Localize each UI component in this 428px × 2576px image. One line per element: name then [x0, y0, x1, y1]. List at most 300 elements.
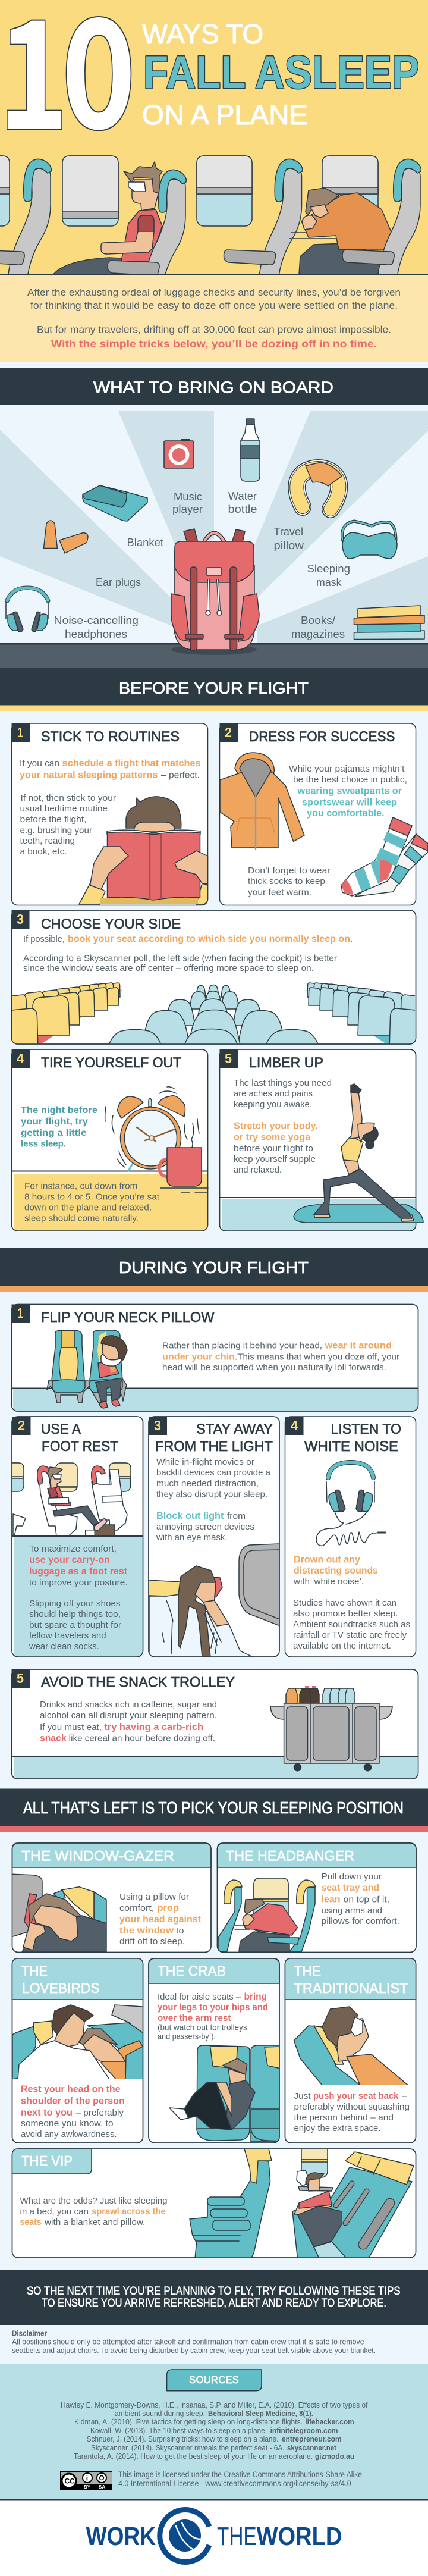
body text: annoying screen devices: [156, 1522, 254, 1532]
banner: closing message: [0, 2270, 428, 2325]
body text: usual bedtime routine: [20, 804, 108, 814]
body text: bring: [244, 1992, 267, 2002]
body text: but spare a thought for: [29, 1620, 121, 1630]
source list: Kowall, W. (2013). The 10 best ways to sleep on a plane.: [90, 2426, 267, 2435]
heading: AVOID THE SNACK TROLLEY: [41, 1675, 235, 1691]
body text: luggage as a foot rest: [29, 1566, 127, 1577]
body text: backlit devices can provide a: [156, 1468, 271, 1478]
panel: the headbanger: [218, 1843, 416, 1953]
icon: water bottle: [241, 419, 260, 481]
body text: your feet warm.: [248, 888, 311, 898]
source list: Skyscanner. (2014). Skyscanner reveals the perfect seat - 6A.: [91, 2443, 284, 2452]
body text: comfort,: [119, 1903, 154, 1913]
source list: Hawley E. Montgomery-Downs, H.E., Insanaa, S.P. and Miller, E.A. (2010). Effects of two types of: [61, 2400, 368, 2409]
panel: 2 dress for success: [220, 723, 428, 905]
body text: fellow travelers and: [29, 1631, 106, 1641]
body text: next to you: [21, 2108, 73, 2118]
floor: [14, 1757, 417, 1778]
heading: CHOOSE YOUR SIDE: [41, 916, 181, 932]
number tab: [12, 1669, 30, 1688]
banner: what to bring on board: WHAT TO BRING ON BOARD: [93, 378, 333, 396]
header: [12, 1843, 211, 1867]
illustration: plane cabin: [0, 155, 422, 274]
heading: THE WINDOW-GAZER: [21, 1848, 174, 1864]
icon: travel pillow: [297, 462, 342, 509]
body text: enjoy the extra space.: [294, 2123, 380, 2133]
heading: [41, 1421, 118, 1455]
license text: This image is licensed under the Creative Commons Attributions-Share Alike: [118, 2470, 362, 2479]
labels: Noise-cancelling: [54, 615, 139, 626]
body text: According to a Skyscanner poll, the left side (when facing the cockpit) is better: [23, 953, 337, 964]
number tab: [12, 1304, 30, 1323]
source list: Behavioral Sleep Medicine, 8(1).: [208, 2409, 313, 2418]
labels: mask: [316, 576, 342, 588]
header: [285, 1958, 416, 2000]
heading: THE: [294, 1963, 321, 1979]
body text: lean: [321, 1895, 340, 1905]
source list: ambient sound during sleep.: [115, 2409, 205, 2418]
body text: [293, 1555, 410, 1651]
title: big number 10: [0, 0, 136, 173]
source list: gizmodo.au: [315, 2452, 354, 2461]
icon: creative commons badge: CC: [64, 2477, 75, 2486]
seat and tray: [224, 158, 303, 274]
illustration: vip seats: [190, 2142, 414, 2258]
body text: – perfect.: [161, 770, 200, 781]
number tab: 4: [291, 1418, 298, 1433]
panel: 1 stick to routines: [12, 723, 208, 905]
body text: If possible,: [23, 934, 65, 944]
body text: with ‘white noise’.: [293, 1577, 364, 1587]
logo: work the world: WORLD: [257, 2522, 342, 2551]
body text: a book, etc.: [20, 847, 67, 857]
labels: Travel: [273, 526, 303, 538]
source list: Schnuer, J. (2014). Surprising tricks: how to sleep on a plane.: [87, 2434, 278, 2443]
illustration: mug: [159, 1148, 208, 1193]
heading: LOVEBIRDS: [22, 1980, 100, 1997]
illustration: headbanger: [218, 1878, 316, 1951]
labels: magazines: [291, 628, 345, 640]
body text: with an eye mask.: [156, 1533, 227, 1543]
source list: lifehacker.com: [305, 2417, 354, 2426]
icon: music player: [164, 439, 194, 468]
banner: before your flight: BEFORE YOUR FLIGHT: [119, 679, 309, 697]
illustration: socks: [341, 817, 428, 897]
labels: Ear plugs: [96, 576, 141, 588]
icon: backpack: [171, 529, 259, 655]
body text: Rather than placing it behind your head,: [162, 1340, 322, 1350]
license text: 4.0 International License - www.creativecommons.org/license/by-sa/4.0: [118, 2478, 351, 2488]
body text: – preferably: [76, 2108, 124, 2118]
title: on a plane: ON A PLANE: [142, 99, 308, 130]
body text: wear clean socks.: [29, 1641, 99, 1651]
sunburst rays: [0, 411, 428, 644]
body text: [248, 764, 407, 898]
number tab: [285, 1417, 303, 1435]
icon: creative commons badge: i: [86, 2474, 88, 2482]
body text: preferably without squashing: [294, 2102, 410, 2112]
labels: Water: [228, 490, 257, 502]
body text: are aches and pains: [234, 1089, 313, 1099]
body text: While your pajamas mightn’t: [289, 764, 405, 774]
heading: [21, 1963, 100, 1997]
illustration: trolley: [270, 1686, 392, 1771]
floor: [0, 644, 428, 668]
body text: [20, 759, 201, 857]
illustration: yoga: [294, 1084, 423, 1223]
number tab: [220, 723, 238, 742]
body text: Ambient soundtracks such as: [293, 1619, 410, 1629]
heading: FLIP YOUR NECK PILLOW: [41, 1309, 215, 1325]
body text: available on the internet.: [293, 1641, 391, 1651]
body text: getting a little: [21, 1128, 87, 1138]
body text: before your flight to: [234, 1143, 313, 1154]
body text: thick socks to keep: [248, 876, 325, 886]
heading: TRADITIONALIST: [294, 1980, 408, 1997]
panel: the traditionalist: [285, 1958, 416, 2143]
panel: the lovebirds: [12, 1958, 143, 2143]
number tab: 1: [17, 725, 23, 740]
intro paragraph: for thinking that it would be easy to doze off once you were settled on the plane.: [30, 300, 398, 311]
icon: ear plugs: [44, 521, 88, 553]
body text: seats: [20, 2217, 42, 2227]
heading: TIRE YOURSELF OUT: [41, 1055, 181, 1071]
illustration: traveller on foot rest: [0, 1463, 131, 1536]
body text: Slipping off your shoes: [29, 1599, 120, 1609]
panel: avoid the snack trolley: [12, 1669, 418, 1779]
illustration: crab: [169, 2045, 281, 2142]
labels: Sleeping: [307, 563, 350, 575]
source list: Kidman, A. (2010). Five tactics for getting sleep on long-distance flights.: [74, 2417, 303, 2426]
yellow note text: sleep should come naturally.: [24, 1214, 139, 1224]
body text: Using a pillow for: [119, 1892, 189, 1902]
header: [218, 1843, 416, 1867]
header panel: [0, 0, 428, 275]
intro panel: [0, 275, 428, 362]
body text: While in-flight movies or: [156, 1457, 254, 1467]
body text: If you can: [20, 759, 59, 769]
body text: keeping you awake.: [234, 1099, 312, 1110]
body text: from: [227, 1511, 246, 1521]
panel: use a foot rest: [0, 1417, 145, 1658]
body text: like cereal an hour before dozing off.: [69, 1734, 215, 1744]
panel: the window-gazer: [9, 1843, 211, 1953]
labels: player: [172, 503, 203, 515]
icon: blanket: [83, 485, 147, 521]
source list: entrepreneur.com: [282, 2434, 341, 2443]
body text: Drinks and snacks rich in caffeine, sugar and: [40, 1700, 217, 1710]
number tab: 1: [17, 1305, 23, 1321]
body text: in a bed, you can: [20, 2207, 89, 2217]
source list: Tarantola, A. (2014). How to get the best sleep of your life on an aeroplane.: [74, 2452, 313, 2461]
number tab: [12, 723, 30, 742]
icon: creative commons badge: BY: [84, 2484, 91, 2490]
intro paragraph: But for many travelers, drifting off at 30,000 feet can prove almost impossible.: [37, 324, 391, 336]
body text: and relaxed.: [234, 1165, 282, 1175]
heading: THE HEADBANGER: [226, 1848, 354, 1864]
yellow note text: 8 hours to 4 or 5. Once you’re sat: [24, 1192, 160, 1202]
sources button: SOURCES: [189, 2374, 239, 2386]
source list: infinitelegroom.com: [270, 2426, 338, 2435]
body text: [21, 1105, 97, 1149]
floor: [222, 1199, 418, 1233]
panel: 5 limber up: [220, 1049, 423, 1233]
body text: [29, 1544, 127, 1651]
banner: before your flight: [0, 668, 428, 711]
body text: be the best choice in public,: [293, 775, 407, 785]
header: [12, 2149, 92, 2174]
panel: the crab: [149, 1958, 281, 2143]
heading: THE VIP: [21, 2154, 73, 2170]
intro highlight: With the simple tricks below, you’ll be dozing off in no time.: [51, 338, 377, 350]
body text: the window: [119, 1926, 174, 1936]
icon: sleeping mask: [342, 521, 397, 559]
body text: Block out light: [156, 1511, 224, 1521]
heading: FROM THE LIGHT: [155, 1439, 273, 1455]
illustration: person reading: [79, 797, 208, 904]
title: ways to: WAYS TO: [142, 18, 263, 49]
heading: LIMBER UP: [249, 1055, 323, 1071]
body text: (but watch out for trolleys: [158, 2023, 247, 2032]
body text: your natural sleeping patterns: [20, 770, 158, 781]
yellow note text: For instance, cut down from: [24, 1182, 137, 1192]
body text: sprawl across the: [92, 2207, 166, 2217]
body text: wear it around: [324, 1340, 392, 1350]
body text: Drown out any: [294, 1555, 360, 1565]
body text: Just: [294, 2091, 311, 2101]
body text: head will be supported when you naturally loll forwards.: [162, 1362, 386, 1372]
heading: [294, 1963, 408, 1997]
yellow note text: [24, 1182, 160, 1224]
logo: work the world: THE: [217, 2522, 257, 2551]
body text: seat tray and: [321, 1883, 379, 1893]
body text: your head against: [119, 1914, 201, 1925]
body text: snack: [40, 1734, 67, 1744]
source list: skyscanner.net: [287, 2443, 337, 2452]
heading: LISTEN TO: [331, 1421, 401, 1437]
banner: during your flight: DURING YOUR FLIGHT: [119, 1258, 309, 1277]
heading: DRESS FOR SUCCESS: [249, 729, 395, 745]
banner: during your flight: [0, 1248, 428, 1292]
body text: Stretch your body,: [234, 1121, 318, 1132]
body text: distracting sounds: [294, 1566, 378, 1576]
body text: less sleep.: [21, 1139, 66, 1149]
body text: sportswear will keep: [302, 797, 397, 808]
body text: someone you know, to: [21, 2119, 114, 2129]
body text: your flight, try: [21, 1117, 88, 1127]
body text: [294, 2091, 410, 2133]
labels: Music: [174, 491, 202, 503]
panel: 3 choose your side: [11, 910, 416, 1045]
body text: [23, 934, 353, 973]
body text: on top of it,: [344, 1895, 389, 1905]
illustration: hoodie: [220, 753, 304, 849]
disclaimer: Disclaimer: [12, 2329, 47, 2338]
body text: [119, 1892, 201, 1947]
body text: try having a carb-rich: [104, 1722, 203, 1732]
license text: [118, 2470, 362, 2488]
labels: pillow: [273, 540, 304, 551]
body text: e.g. brushing your: [20, 826, 92, 835]
body text: shoulder of the person: [21, 2096, 125, 2107]
panel: 4 tire yourself out: [12, 1049, 208, 1231]
body text: alcohol can all disrupt your sleeping pattern.: [40, 1710, 217, 1721]
panel: sources: [0, 2364, 428, 2501]
note background: [14, 1537, 145, 1658]
body text: they also disrupt your sleep.: [156, 1489, 268, 1499]
icon: headphones: [6, 588, 49, 632]
illustration: lovebirds: [12, 2005, 143, 2079]
disclaimer: seatbelts and adjust chairs. To avoid being disturbed by cabin crew, keep your seat belt visible above your blanket.: [12, 2346, 376, 2355]
person: man with eye mask: [54, 162, 162, 274]
body text: using arms and: [321, 1906, 382, 1916]
icon: globe: [160, 2509, 209, 2562]
body text: To maximize comfort,: [29, 1544, 117, 1554]
labels: Blanket: [127, 537, 163, 549]
heading: [155, 1421, 273, 1455]
number tab: [220, 1049, 238, 1068]
body text: the person behind – and: [294, 2113, 394, 2123]
body text: to improve your posture.: [29, 1578, 127, 1588]
illustration: cabin seats: [12, 982, 415, 1043]
logo: work the world: WORK: [86, 2522, 156, 2551]
body text: use your carry-on: [29, 1555, 110, 1565]
floor: [13, 1389, 420, 1412]
body text: book your seat according to which side you normally sleep on: [68, 934, 350, 944]
sources button: [167, 2370, 262, 2391]
body text: you comfortable.: [307, 808, 384, 819]
icon: creative commons badge: SA: [99, 2484, 105, 2490]
body text: drift off to sleep.: [119, 1936, 185, 1947]
body text: also promote better sleep.: [293, 1609, 398, 1619]
body text: .: [350, 934, 353, 944]
windows: [0, 156, 378, 226]
panel: listen to white noise: [285, 1417, 416, 1657]
banner: sleeping position: [0, 1788, 428, 1832]
number tab: 3: [17, 911, 24, 927]
number tab: 3: [154, 1418, 161, 1433]
body text: before the flight,: [20, 814, 87, 825]
heading: USE A: [41, 1421, 81, 1437]
heading: THE CRAB: [158, 1963, 226, 1979]
panel: what to bring: [0, 411, 428, 668]
body text: The last things you need: [234, 1078, 332, 1088]
body text: keep yourself supple: [234, 1154, 316, 1164]
table area: [14, 1174, 208, 1231]
body text: If you must eat,: [40, 1722, 102, 1732]
icon: creative commons badge: [60, 2471, 112, 2490]
body text: since the window seats are off center – offering more space to sleep on.: [23, 963, 314, 973]
illustration: headphones: [316, 1462, 385, 1546]
number tab: 2: [18, 1418, 25, 1433]
body text: [234, 1078, 332, 1175]
heading: WHITE NOISE: [304, 1439, 398, 1455]
body text: avoid any awkwardness.: [21, 2129, 117, 2139]
body text: [156, 1457, 271, 1543]
body text: [162, 1340, 399, 1372]
body text: teeth, reading: [20, 836, 75, 846]
labels: Books/: [301, 615, 335, 626]
illustration: seats and traveller: [47, 1330, 127, 1408]
illustration: alarm clock: [105, 1087, 199, 1171]
body text: [20, 2196, 168, 2227]
panel: the vip: [12, 2142, 416, 2258]
heading: STAY AWAY: [196, 1421, 273, 1437]
body text: with a blanket and pillow.: [44, 2217, 145, 2227]
panel: flip your neck pillow: [12, 1304, 420, 1412]
body text: and passers-by!).: [158, 2032, 216, 2041]
heading: [304, 1421, 401, 1455]
labels: bottle: [228, 503, 257, 515]
intro paragraph: [27, 287, 401, 336]
body text: Ideal for aisle seats –: [158, 1992, 241, 2002]
body text: [21, 2085, 125, 2139]
body text: your legs to your hips and: [158, 2002, 268, 2013]
disclaimer: All positions should only be attempted after takeoff and confirmation from cabin crew that it is safe to remove: [12, 2337, 364, 2346]
body text: rainfall or TV static are freely: [293, 1630, 407, 1640]
number tab: [12, 1417, 31, 1435]
body text: to: [176, 1926, 184, 1936]
body text: [321, 1872, 399, 1926]
intro paragraph: After the exhausting ordeal of luggage checks and security lines, you’d be forgiven: [27, 287, 401, 298]
body text: wearing sweatpants or: [297, 786, 402, 796]
logo: work the world: [0, 2501, 428, 2576]
body text: much needed distraction,: [156, 1478, 259, 1488]
labels: headphones: [65, 628, 127, 640]
body text: or try some yoga: [234, 1133, 310, 1143]
panel: stay away from the light: [149, 1417, 280, 1657]
heading: THE: [21, 1963, 48, 1979]
person: sleeping on tray: [289, 188, 392, 274]
body text: What are the odds? Just like sleeping: [20, 2196, 168, 2206]
body text: pillows for comfort.: [321, 1916, 399, 1926]
body text: Studies have shown it can: [293, 1598, 396, 1608]
number tab: 5: [17, 1671, 24, 1686]
body text: [158, 1992, 268, 2041]
number tab: [12, 910, 30, 929]
body text: [40, 1700, 217, 1744]
number tab: 2: [225, 725, 232, 740]
body text: prop: [157, 1903, 179, 1913]
number tab: [12, 1049, 30, 1068]
source list: [61, 2400, 368, 2461]
body text: under your chin: [162, 1352, 235, 1362]
labels: [54, 490, 350, 640]
icon: books: [354, 606, 424, 639]
body text: push your seat back: [313, 2091, 399, 2101]
number tab: [149, 1417, 167, 1435]
header: [12, 1958, 143, 2000]
illustration: traditionalist: [294, 2007, 408, 2085]
yellow note text: down on the plane and relaxed,: [24, 1203, 152, 1213]
body text: If not, then stick to your: [20, 793, 116, 803]
body text: .This means that when you doze off, your: [235, 1352, 399, 1362]
body text: The night before: [21, 1105, 97, 1115]
body text: over the arm rest: [158, 2013, 231, 2023]
number tab: 5: [225, 1051, 232, 1066]
header: [149, 1958, 279, 1983]
body text: should help things too,: [29, 1609, 121, 1619]
illustration: woman with eye mask: [149, 1544, 280, 1657]
number tab: 4: [17, 1051, 24, 1066]
body text: Don’t forget to wear: [248, 866, 331, 876]
heading: STICK TO ROUTINES: [41, 729, 180, 745]
illustration: window-gazer: [9, 1874, 106, 1952]
disclaimer: [12, 2329, 376, 2355]
body text: Pull down your: [321, 1872, 382, 1882]
body text: schedule a flight that matches: [62, 759, 201, 769]
banner: what to bring on board: [0, 368, 428, 405]
